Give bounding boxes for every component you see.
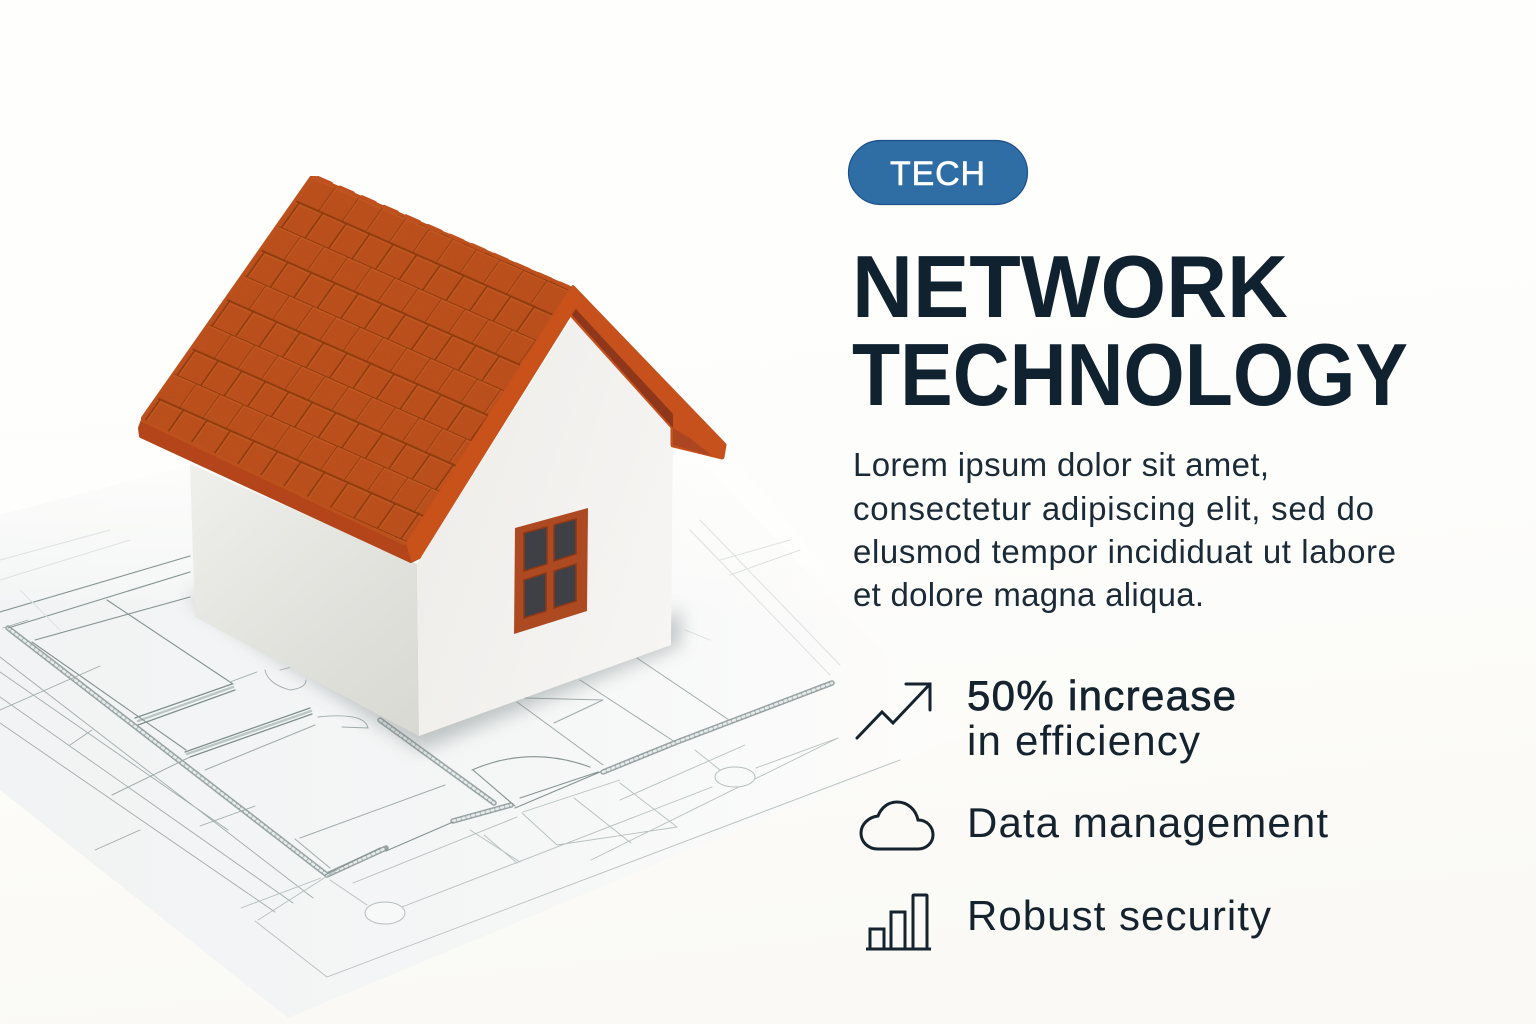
efficiency text <box>967 672 1236 764</box>
roof ridge bumps <box>318 178 568 287</box>
roof gable edge band <box>407 286 580 561</box>
tiled roof panel <box>141 176 571 545</box>
tag pill <box>848 140 1028 204</box>
title: NETWORK <box>852 237 1288 336</box>
right roof slope underside <box>573 288 724 457</box>
icon: bar chart <box>866 895 931 949</box>
window <box>514 508 588 634</box>
efficiency text: in efficiency <box>967 717 1200 764</box>
description paragraph: Lorem ipsum dolor sit amet, <box>853 446 1269 483</box>
right wall <box>417 316 673 736</box>
data management text: Data management <box>967 799 1328 846</box>
title <box>852 237 1408 424</box>
window panes <box>524 519 576 618</box>
roof eave band <box>140 420 419 561</box>
blueprint sheet under the house <box>0 440 965 1018</box>
icon: cloud <box>861 802 933 849</box>
feature: data management <box>861 799 1328 849</box>
description paragraph: et dolore magna aliqua. <box>853 576 1204 613</box>
blueprint wall lines <box>0 520 900 977</box>
house model <box>140 176 724 736</box>
description paragraph <box>853 446 1396 613</box>
description paragraph: elusmod tempor incididuat ut labore <box>853 533 1396 570</box>
feature: efficiency <box>857 672 1236 764</box>
title: TECHNOLOGY <box>852 325 1408 424</box>
icon: trending arrow <box>857 684 930 738</box>
left wall <box>190 464 419 736</box>
tag pill: TECH <box>890 155 985 193</box>
efficiency text: 50% increase <box>967 672 1236 719</box>
security text: Robust security <box>967 892 1271 939</box>
soft shadow under the house <box>190 590 680 750</box>
description paragraph: consectetur adipiscing elit, sed do <box>853 490 1374 527</box>
feature: security <box>866 892 1271 949</box>
